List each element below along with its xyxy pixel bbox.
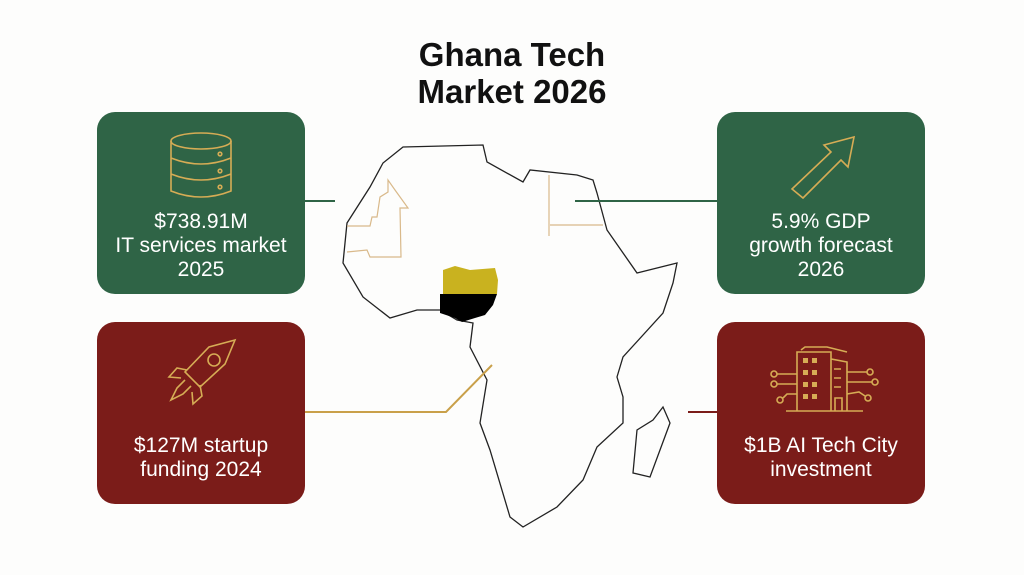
text: growth forecast xyxy=(749,234,893,257)
icon: rocket xyxy=(168,338,236,406)
text: investment xyxy=(770,458,872,481)
title: Market 2026 xyxy=(418,73,606,110)
text: $1B AI Tech City xyxy=(744,434,898,457)
panel: startup funding xyxy=(97,322,305,504)
text: $127M startup xyxy=(134,434,268,457)
text: $738.91M xyxy=(154,210,248,233)
text xyxy=(749,210,893,281)
panel: AI Tech City xyxy=(717,322,925,504)
text: funding 2024 xyxy=(140,458,262,481)
highlighted country xyxy=(440,266,498,322)
icon: arrow up xyxy=(790,136,855,200)
map outline xyxy=(343,145,677,527)
panel: IT services xyxy=(97,112,305,294)
title: Ghana Tech xyxy=(419,36,605,73)
text: 2026 xyxy=(798,258,844,281)
text: 5.9% GDP xyxy=(771,210,871,233)
text xyxy=(134,434,268,481)
map borders xyxy=(347,175,603,257)
text: IT services market xyxy=(115,234,287,257)
title xyxy=(418,36,606,110)
text: 2025 xyxy=(178,258,224,281)
text xyxy=(115,210,287,281)
panel: GDP growth xyxy=(717,112,925,294)
icon: database xyxy=(170,132,232,198)
connector lines xyxy=(305,201,718,412)
icon: smart building xyxy=(770,346,879,412)
text xyxy=(744,434,898,481)
